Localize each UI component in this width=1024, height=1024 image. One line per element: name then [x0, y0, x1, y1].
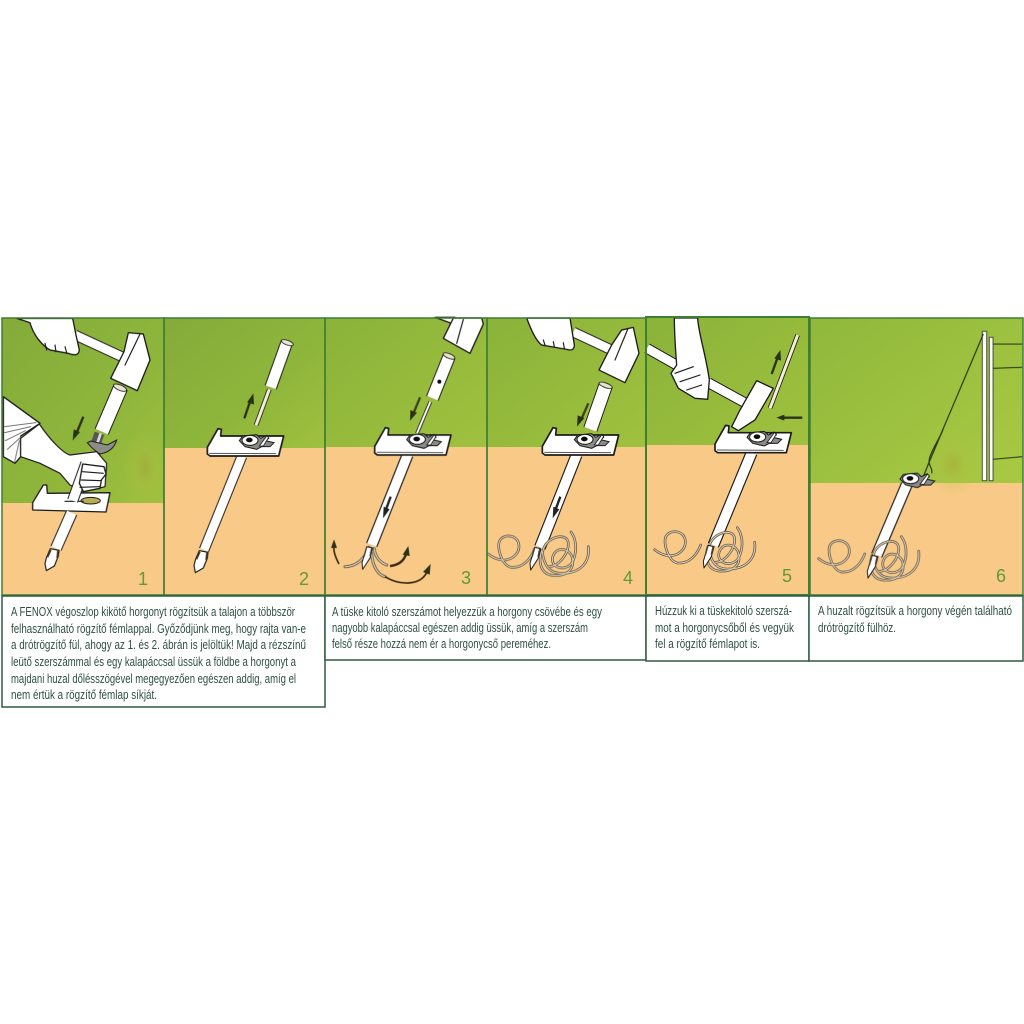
icon: curled wires and tip — [655, 528, 755, 571]
icon: curled wires and tip — [819, 537, 919, 580]
icon: anchor tube — [372, 455, 408, 545]
caption panel: steps 3 and 4 — [325, 596, 646, 660]
caption panel: step 6: drótrögzítő fülhöz. — [818, 621, 896, 635]
caption panel: steps 1 and 2: felhasználható rögzítő fémlappal. Győződjünk meg, hogy rajta van-e — [11, 622, 306, 636]
step numbers: 2 — [299, 569, 309, 589]
step 1 illustration: hammer, driving tool, hand and plate — [3, 318, 150, 571]
arrows: wire spreading directions — [331, 539, 431, 583]
step 5 illustration: remove tool and plate — [647, 318, 802, 571]
icon: emerging wires and tip — [345, 547, 387, 577]
icon: gloved hand and hammer — [527, 318, 639, 383]
caption panel: steps 1 and 2: leütő szerszámmal és egy kalapáccsal üssük a földbe a horgonyt a — [11, 655, 296, 669]
icon: anchor tube and spear tip — [45, 513, 72, 571]
icon: hand with hammer — [647, 318, 773, 431]
step 4 illustration: wires curled in the ground — [488, 318, 639, 575]
icon: gloved hand holding hammer — [17, 318, 123, 357]
icon: anchor tube and tip — [194, 456, 242, 573]
icon: plate with eye — [542, 428, 619, 455]
caption panel: step 5: fel a rögzítő fémlapot is. — [655, 637, 760, 651]
caption panel: steps 3 and 4: felső része hozzá nem ér a horgonycső pereméhez. — [332, 637, 551, 651]
icon: driving tool — [590, 381, 613, 429]
icon: plate with hole — [33, 485, 110, 512]
arrow: double downward — [577, 403, 588, 427]
step numbers: 1 — [138, 569, 148, 589]
step numbers: 5 — [782, 566, 792, 586]
icon: spike tool — [417, 351, 456, 433]
step 2 illustration: tool removed from anchor — [194, 338, 294, 573]
icon: curled wires and tip — [488, 532, 589, 575]
caption panel: steps 1 and 2: A FENOX végoszlop kikötő horgonyt rögzítsük a talajon a többször — [11, 605, 295, 619]
caption panel: steps 3 and 4: nagyobb kalapáccsal egészen addig üssük, amíg a szerszám — [332, 621, 588, 635]
icon: hammer head — [435, 317, 483, 353]
step numbers: 3 — [461, 568, 471, 588]
caption panel: step 5: mot a horgonycsőből és vegyük — [655, 621, 795, 635]
arrow: downward — [73, 417, 83, 441]
caption panel: steps 1 and 2: majdani huzal dőlésszögével megegyezően egészen addig, amíg el — [11, 672, 296, 686]
icon: anchor tube — [713, 453, 752, 545]
caption panel: step 5: Húzzuk ki a tüskekitoló szerszá- — [655, 604, 792, 618]
arrow: double downward — [410, 397, 420, 421]
caption panel: steps 1 and 2: nem értük a rögzítő fémlap síkját. — [11, 688, 157, 702]
caption panel: step 6 — [809, 596, 1023, 661]
step numbers: 4 — [623, 568, 633, 588]
icon: hammer head — [111, 333, 150, 391]
icon: removed spike — [770, 335, 798, 408]
step numbers: 6 — [996, 566, 1006, 586]
icon: anchor tube — [540, 455, 577, 547]
icon: guy wire — [923, 334, 983, 477]
panel frames — [2, 317, 1023, 595]
caption panel: steps 3 and 4: A tüske kitoló szerszámot helyezzük a horgony csövébe és egy — [332, 605, 603, 619]
icon: anchor eye — [900, 473, 935, 488]
icon: driving tool tube — [87, 382, 127, 454]
panel backgrounds: green sky and sand ground — [2, 318, 1023, 595]
icon: removed tool — [256, 338, 294, 425]
icon: plate with eye — [715, 425, 791, 453]
step 3 illustration: spike tool driven, wires spread — [331, 317, 483, 583]
caption panel: steps 1 and 2 — [2, 596, 325, 707]
step 6 illustration: wire tied to anchor and fence post — [819, 331, 1022, 580]
caption panel: steps 1 and 2: a drótrögzítő fül, ahogy az 1. és 2. ábrán is jelöltük! Majd a rézszínű — [11, 638, 306, 652]
arrow: upward — [772, 350, 781, 374]
icon: fence posts — [982, 331, 1022, 481]
icon: plate with eye — [207, 429, 284, 456]
icon: hand gripping the tube — [3, 397, 107, 501]
arrow: leftward — [776, 415, 802, 421]
arrow: upward — [244, 393, 254, 418]
step numbers — [138, 566, 1006, 589]
icon: plate with eye — [375, 428, 451, 455]
icon: anchor tube — [877, 485, 907, 555]
caption panel: step 5 — [646, 596, 809, 661]
